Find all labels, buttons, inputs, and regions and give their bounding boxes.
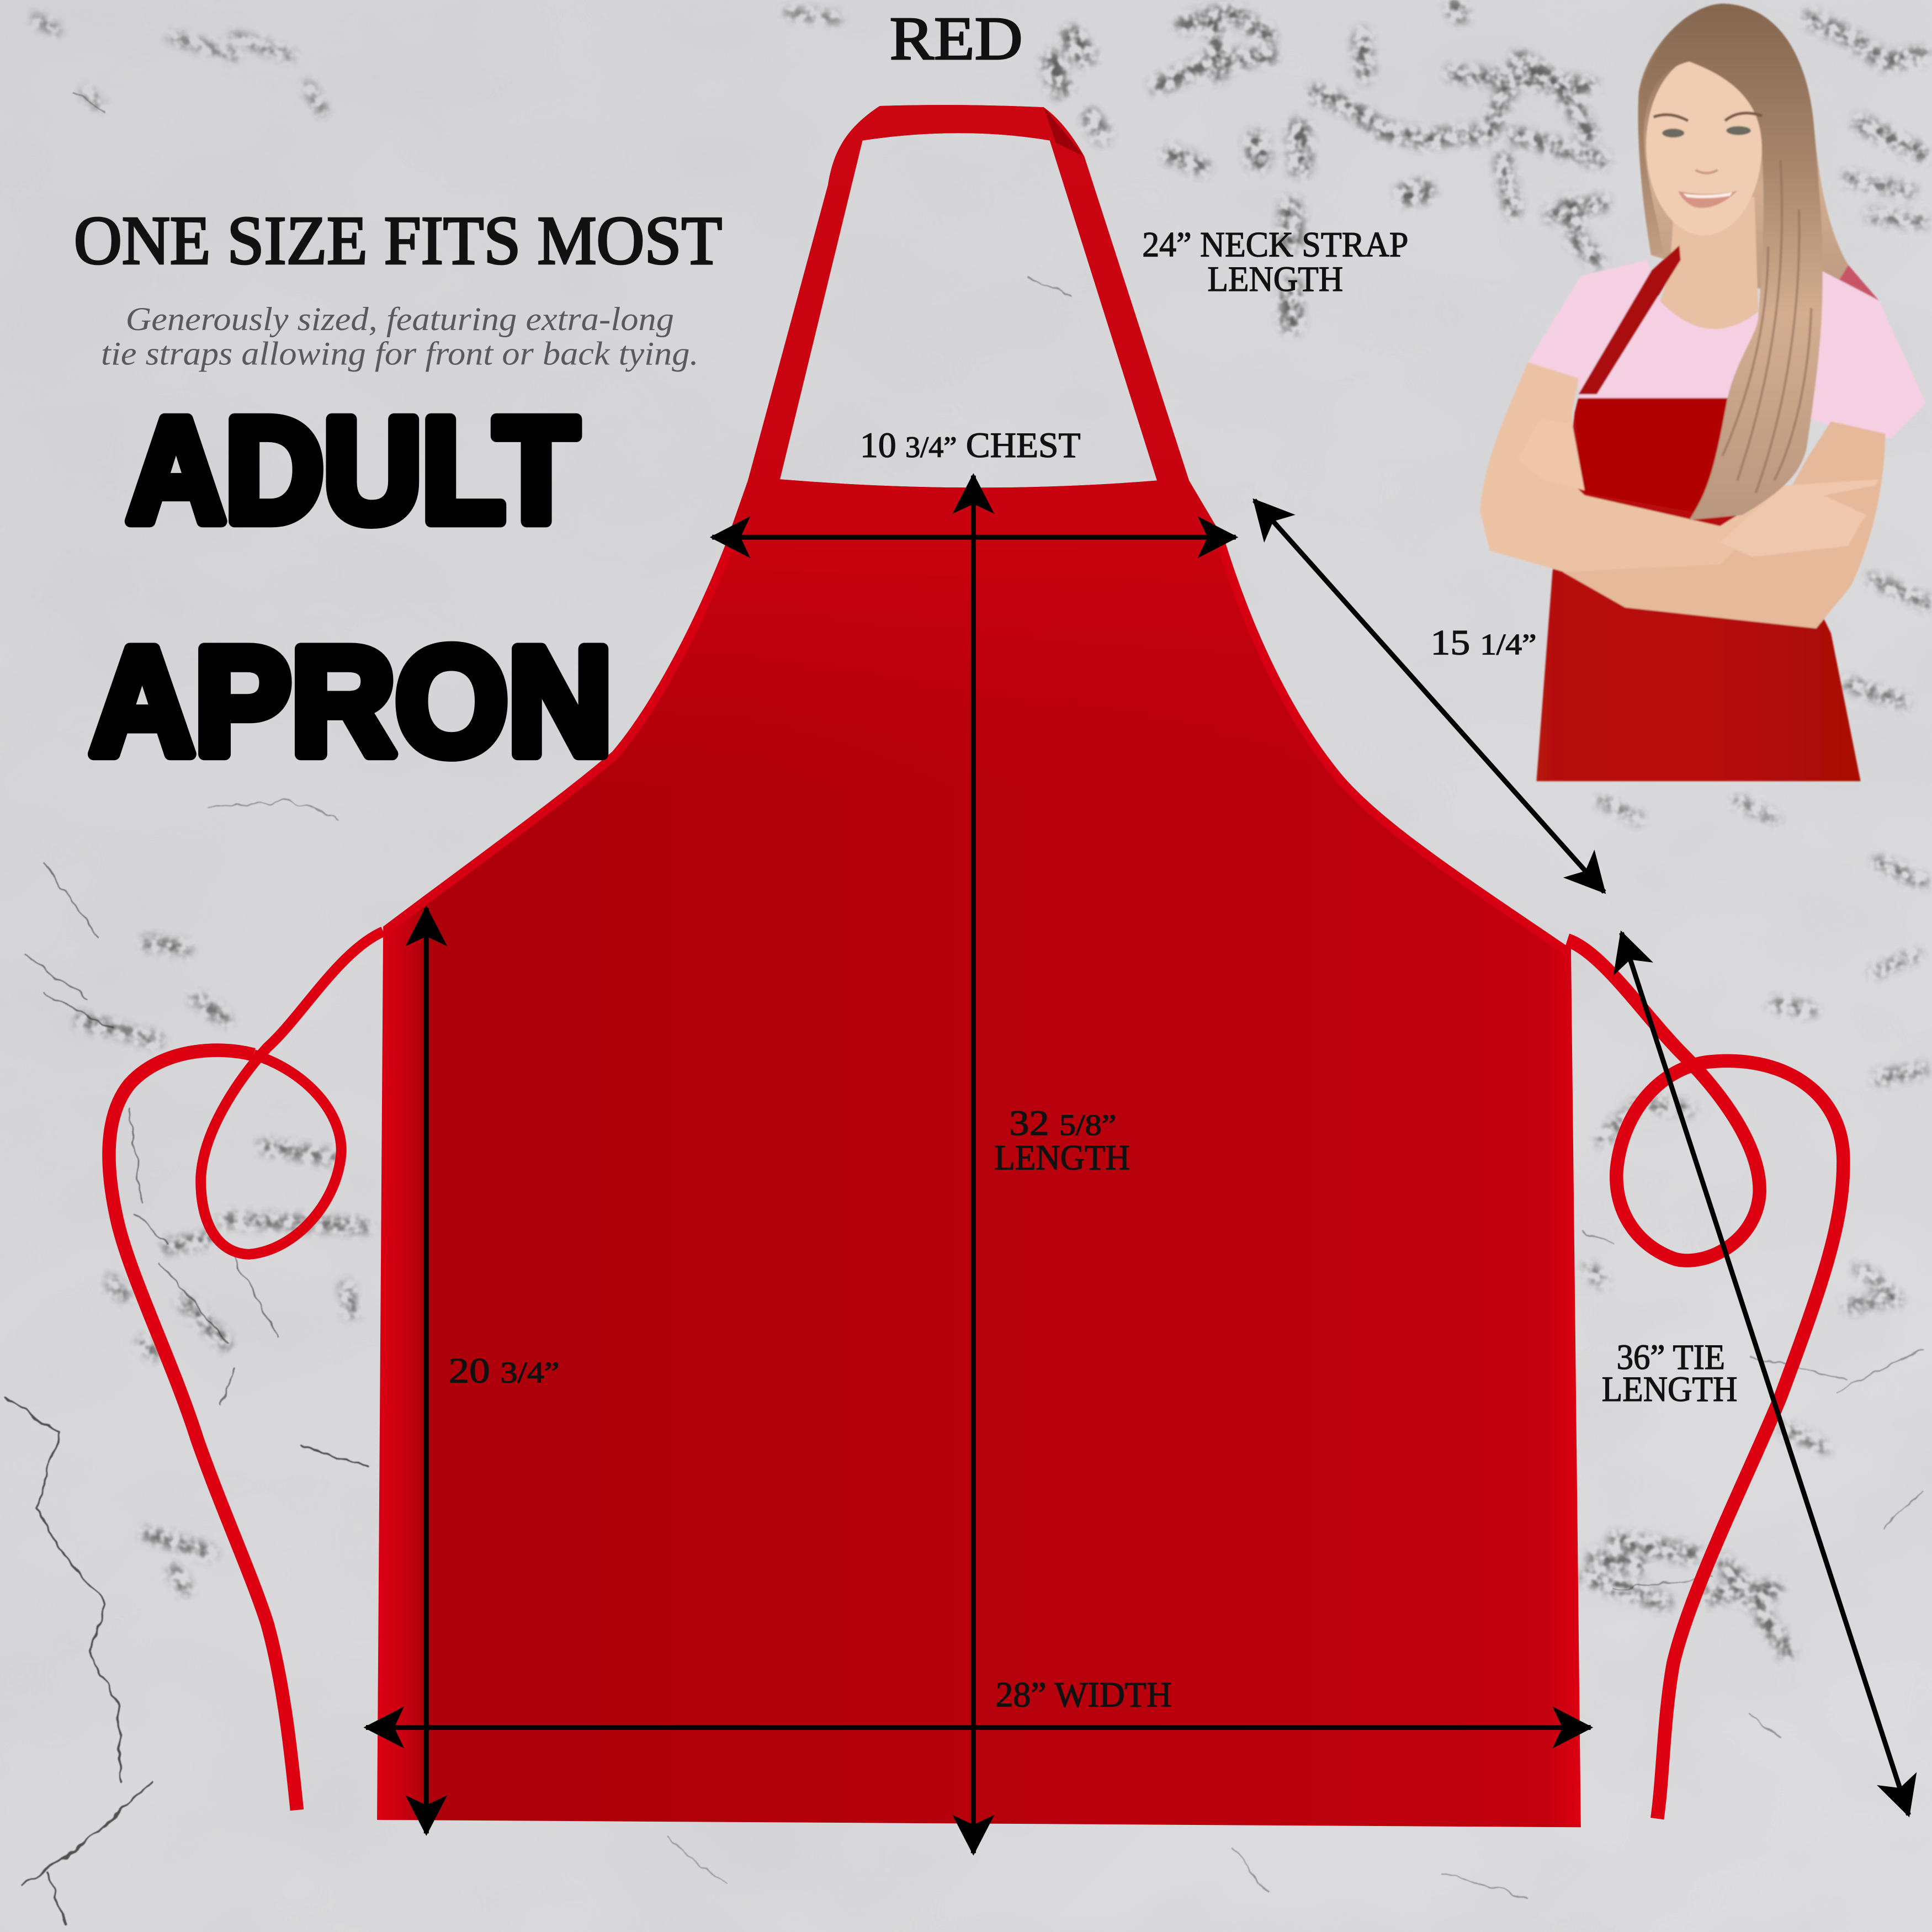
tucked hand	[1518, 419, 1585, 490]
arrow: bottom width	[366, 1726, 1591, 1728]
text block: description: tie straps allowing for front or back tying.	[101, 336, 699, 373]
arrow: chest width	[712, 536, 1236, 538]
strap fold shadow	[1044, 107, 1084, 156]
text block: description: Generously sized, featuring extra-long	[126, 301, 674, 338]
title: adult apron: ADULT	[127, 388, 578, 553]
left waist tie	[109, 932, 383, 1810]
arms	[1480, 362, 1879, 574]
label: 15 1/4: 15 1/4”	[1431, 623, 1536, 662]
label: width: 28” WIDTH	[996, 1675, 1172, 1715]
arrow: total length	[972, 476, 974, 1853]
face	[1646, 55, 1762, 235]
label: length	[994, 1103, 1130, 1177]
photo: woman wearing red apron	[1480, 4, 1926, 781]
label: tie length	[1602, 1337, 1737, 1409]
title: adult apron: APRON	[90, 615, 612, 787]
label: neck strap: LENGTH	[1207, 259, 1343, 299]
facial features	[1654, 113, 1762, 121]
hair behind	[1822, 265, 1879, 308]
heading: one size fits most: ONE SIZE FITS MOST	[74, 203, 722, 279]
hair strands	[1723, 160, 1811, 493]
label: length: LENGTH	[994, 1138, 1130, 1177]
heading: colour name: RED	[890, 5, 1023, 73]
apron body with neck strap	[377, 105, 1581, 1827]
label: neck strap	[1142, 225, 1408, 299]
label: chest: 10 3/4” CHEST	[860, 426, 1081, 465]
right waist tie	[1567, 940, 1843, 1819]
arrow: tie length	[1622, 933, 1909, 1815]
label: tie length: 36” TIE	[1617, 1337, 1725, 1377]
label: length: 32 5/8”	[1009, 1103, 1116, 1143]
label: 20 3/4: 20 3/4”	[448, 1351, 559, 1390]
arrow: side length	[425, 908, 427, 1833]
hair front	[1638, 4, 1823, 520]
arrow: armhole curve	[1254, 500, 1604, 892]
side binding	[383, 541, 1571, 949]
apron body on model	[1536, 398, 1861, 781]
t-shirt	[1528, 260, 1926, 439]
neck	[1657, 197, 1758, 330]
neck strap and bib top colour	[633, 105, 1303, 724]
apron neck strap on model	[1578, 245, 1681, 394]
title: adult apron	[90, 388, 612, 787]
label: tie length: LENGTH	[1602, 1370, 1737, 1409]
label: neck strap: 24” NECK STRAP	[1142, 225, 1408, 264]
text block: description	[101, 301, 699, 373]
